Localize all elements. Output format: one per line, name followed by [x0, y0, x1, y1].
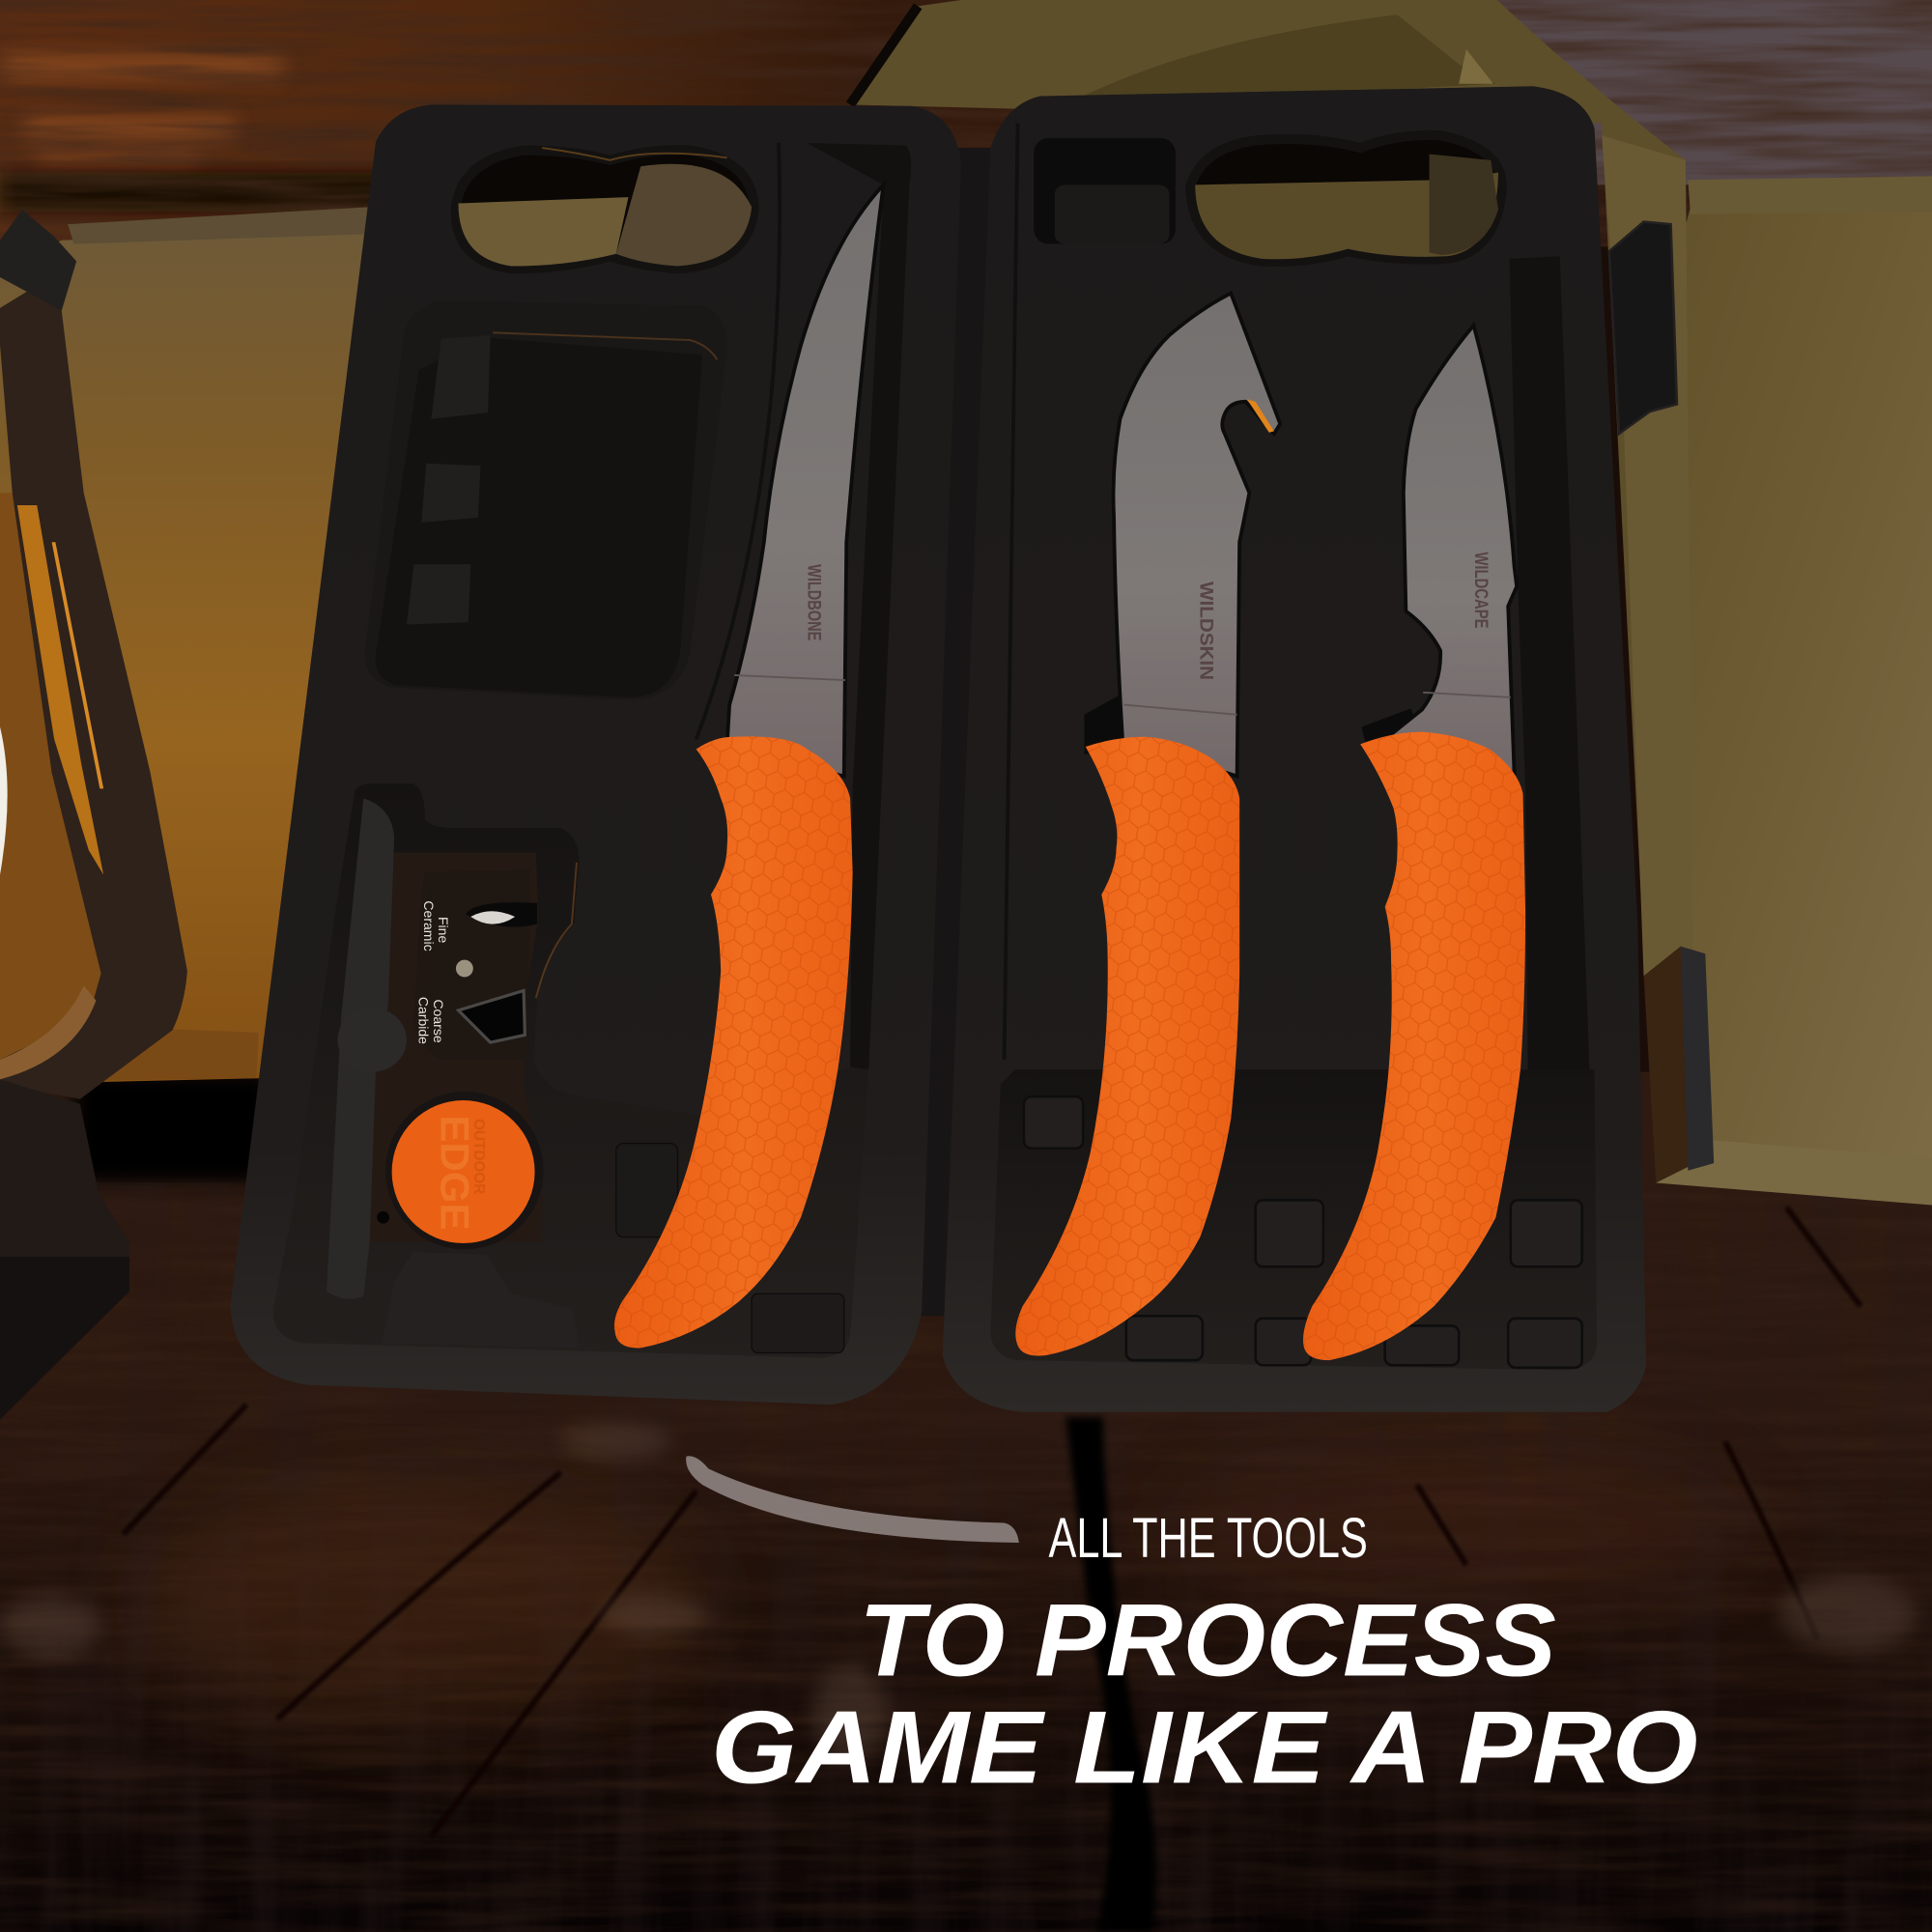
compartment rim light: [493, 332, 717, 359]
icon: knife sharpener: [327, 799, 543, 1299]
strap shadow edge: [850, 6, 918, 104]
bag webbing strip, right top: [1688, 176, 1932, 214]
orange dial: [392, 1100, 535, 1243]
label: fine ceramic: Ceramic: [421, 900, 437, 952]
floor pads: [616, 1144, 678, 1237]
bag webbing strip, left bottom: [0, 1023, 259, 1082]
knife channel: [807, 143, 911, 1069]
warm rim light on cut-out: [542, 148, 727, 160]
heading: game like a pro: GAME LIKE A PRO: [711, 1690, 1698, 1805]
dial logo: OUTDOOR: [470, 1119, 487, 1194]
dial ring: [385, 1092, 543, 1249]
tray floor: [273, 783, 868, 1358]
bag seen through cut-out: [458, 197, 629, 267]
panel: olive canvas bag, right: [1627, 203, 1932, 1182]
ricasso line: [1423, 693, 1511, 697]
wood cracks and dust: [124, 1208, 1861, 1836]
orange handle: [614, 736, 853, 1348]
bag strap: [850, 0, 1691, 974]
square recess: [1034, 138, 1176, 244]
bag webbing strip, right bottom: [1656, 1140, 1932, 1205]
ricasso line: [734, 675, 845, 680]
blade mark: WILDSKIN: [1195, 582, 1215, 680]
icon: oil lantern: [0, 210, 187, 1419]
blade mark: WILDBONE: [804, 564, 824, 640]
orange handle: [1303, 732, 1525, 1360]
panel: open knife case, left half: [231, 104, 961, 1405]
bag strap inner pocket: [1083, 14, 1495, 96]
compartment floor: [376, 337, 702, 697]
screw: [456, 960, 473, 977]
finger cut-out: [456, 150, 754, 269]
strap tan highlight: [1459, 49, 1493, 84]
bag seen through cut-out: [1195, 173, 1498, 259]
fine slot: [466, 902, 537, 926]
icon: case latch top: [1609, 222, 1677, 434]
strap right webbing: [1602, 135, 1693, 976]
panel: hinge between case halves: [906, 148, 992, 1316]
label: fine ceramic: Fine: [436, 917, 451, 943]
ricasso line: [1123, 705, 1237, 715]
orange handle: [1015, 737, 1239, 1355]
sharpener compartment: [365, 300, 727, 699]
label: coarse carbide: Carbide: [416, 997, 432, 1044]
compartment warm light: [536, 863, 577, 998]
finger cut-out: [1190, 135, 1502, 262]
bag webbing strip, left top: [68, 207, 370, 244]
hook sharpened edge: [1247, 399, 1274, 433]
text: all the tools: ALL THE TOOLS: [1048, 1507, 1368, 1570]
pivot knob: [337, 1008, 407, 1072]
right knife channel: [1509, 256, 1589, 1069]
square recess pad: [1055, 185, 1169, 244]
blade channel rail: [696, 143, 780, 739]
handle texture: [1016, 737, 1239, 1356]
coarse slot: [458, 991, 525, 1042]
tray floor: [991, 1069, 1597, 1370]
recess pads: [1024, 1096, 1582, 1368]
icon: case latch bottom: [1644, 947, 1714, 1182]
icon: fillet knife WildBone: [604, 185, 884, 1355]
raised floor block: [382, 1252, 579, 1348]
heading: to process: TO PROCESS: [859, 1582, 1556, 1698]
icon: knife sharpener: EDGE: [433, 1115, 478, 1231]
rim groove: [1005, 124, 1018, 1060]
recess pads: [407, 335, 491, 625]
blade mark: WILDCAPE: [1470, 552, 1491, 629]
handle slot shadows: [1084, 690, 1128, 754]
icon: gut hook knife WildSkin: [1005, 294, 1280, 1368]
label: coarse carbide: Coarse: [431, 999, 446, 1043]
mounting hole: [377, 1211, 389, 1224]
decorative curved callout stroke: [686, 1456, 1019, 1543]
icon: caping knife WildCape: [1293, 326, 1540, 1368]
handle texture: [614, 736, 852, 1349]
handle texture: [1304, 732, 1525, 1360]
panel: open knife case, right half: [943, 86, 1646, 1412]
panel: tan canvas bag, left: [0, 228, 370, 1084]
